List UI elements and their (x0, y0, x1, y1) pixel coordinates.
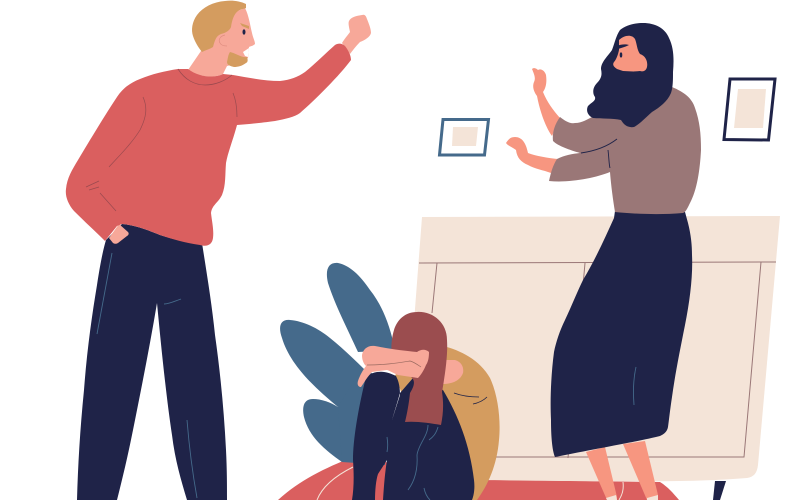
woman skirt (551, 211, 692, 457)
woman face (613, 36, 647, 71)
woman legs (586, 441, 658, 500)
man eyebrow (240, 23, 249, 29)
girl sitting (352, 312, 500, 500)
man eye (242, 29, 246, 35)
man raised fist (342, 15, 371, 54)
man beard (227, 52, 248, 67)
man hair (192, 1, 246, 52)
man standing (66, 1, 371, 500)
woman standing (506, 23, 701, 500)
picture frame: navy (724, 79, 775, 140)
man mouth (243, 48, 249, 57)
skirt fold (633, 367, 636, 405)
sweater fold lines (86, 69, 237, 211)
man trousers (77, 224, 227, 500)
woman socks (606, 495, 658, 500)
girl face (440, 360, 463, 384)
cushion creases (454, 393, 487, 404)
man sweater (66, 44, 351, 246)
woman eyebrow and eye (617, 44, 629, 58)
beanbag / cushion (395, 346, 500, 500)
man neck and face (188, 8, 255, 77)
girl arm crease (367, 361, 421, 367)
jean seam lines (387, 425, 438, 500)
rug (278, 457, 679, 500)
trouser seams (97, 253, 197, 498)
girl crossed arms (358, 346, 429, 387)
woman hair (587, 23, 674, 127)
man ear (219, 35, 227, 46)
picture frame: blue (440, 120, 488, 155)
sofa leg (713, 481, 726, 500)
plant leaves (280, 263, 395, 465)
girl back and legs (352, 372, 474, 500)
girl hair (391, 312, 447, 425)
woman lower hand and arm (506, 137, 558, 173)
blouse folds (581, 139, 617, 168)
man hand in pocket (109, 224, 129, 244)
sofa (405, 216, 780, 481)
woman raised hand and arm (532, 68, 560, 136)
woman blouse (549, 87, 701, 214)
